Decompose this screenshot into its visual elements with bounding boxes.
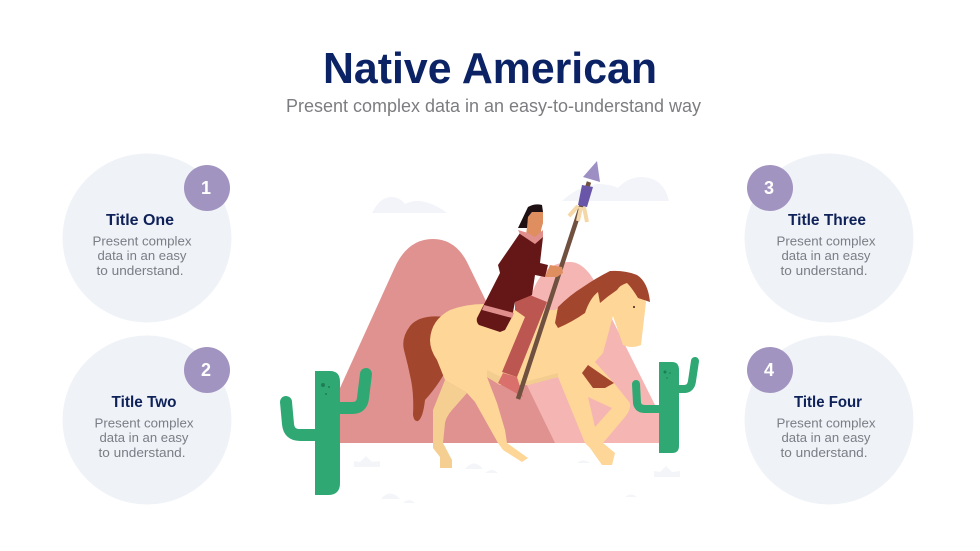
panel: Title One: 1 [201, 178, 211, 198]
horse far hind leg [433, 380, 467, 468]
subtitle: Present complex data in an easy-to-understand way [286, 96, 701, 116]
illustration: rider on horse in desert [286, 161, 695, 503]
panel: Title One: Title One [106, 212, 174, 229]
mountain right [525, 262, 660, 443]
panel: Title Two: to understand. [98, 445, 186, 460]
rider hand [545, 265, 563, 277]
panel: Title Four: Title Four [794, 394, 862, 411]
panel: Title Four: 4 [764, 360, 774, 380]
panel: Title Three: Present complex [776, 234, 876, 248]
panel: Title Two: 2 [201, 360, 211, 380]
horse belly shade [487, 370, 558, 385]
panel: Title Two [62, 336, 232, 504]
horse tail [403, 316, 445, 421]
rider hair [518, 204, 543, 228]
panel: Title One [62, 154, 232, 322]
panel: Title Four [744, 336, 914, 504]
cloud right [562, 177, 669, 201]
horse eye [633, 306, 635, 308]
panel: Title Two: data in an easy [100, 430, 189, 445]
cactus left [286, 371, 366, 495]
panel: Title Two: Present complex [94, 416, 194, 430]
horse leg gap [588, 397, 612, 427]
robe hem [482, 305, 514, 318]
panel: Title Four: data in an easy [782, 430, 871, 445]
rider boot [498, 373, 523, 397]
panel: Title Three: data in an easy [782, 248, 871, 263]
panel: Title Three: Title Three [788, 212, 866, 229]
spear head [583, 161, 600, 182]
spear feathers [569, 206, 587, 222]
cloud left [372, 197, 447, 213]
panel: Title Four: Present complex [776, 416, 876, 430]
title: Native American [323, 44, 657, 93]
horse body with near legs, neck and head [430, 275, 646, 465]
panel: Title Three [744, 154, 914, 322]
horse shoulder patch [582, 365, 614, 388]
cactus right [636, 361, 695, 453]
spear shaft [518, 182, 589, 399]
panel: Title Three: to understand. [780, 263, 868, 278]
panel: Title Three: 3 [764, 178, 774, 198]
panel: Title One: data in an easy [98, 248, 187, 263]
rider robe [477, 233, 548, 332]
rider face [526, 212, 543, 238]
panel: Title Four: to understand. [780, 445, 868, 460]
ground details [354, 456, 680, 503]
spear binding [578, 185, 593, 207]
panel: Title Two: Title Two [112, 394, 177, 411]
rider collar [518, 230, 543, 244]
panel: Title One: Present complex [92, 234, 192, 248]
rider leg [502, 293, 547, 377]
panel: Title One: to understand. [96, 263, 184, 278]
horse mane [555, 271, 650, 328]
mountain left [340, 239, 555, 443]
